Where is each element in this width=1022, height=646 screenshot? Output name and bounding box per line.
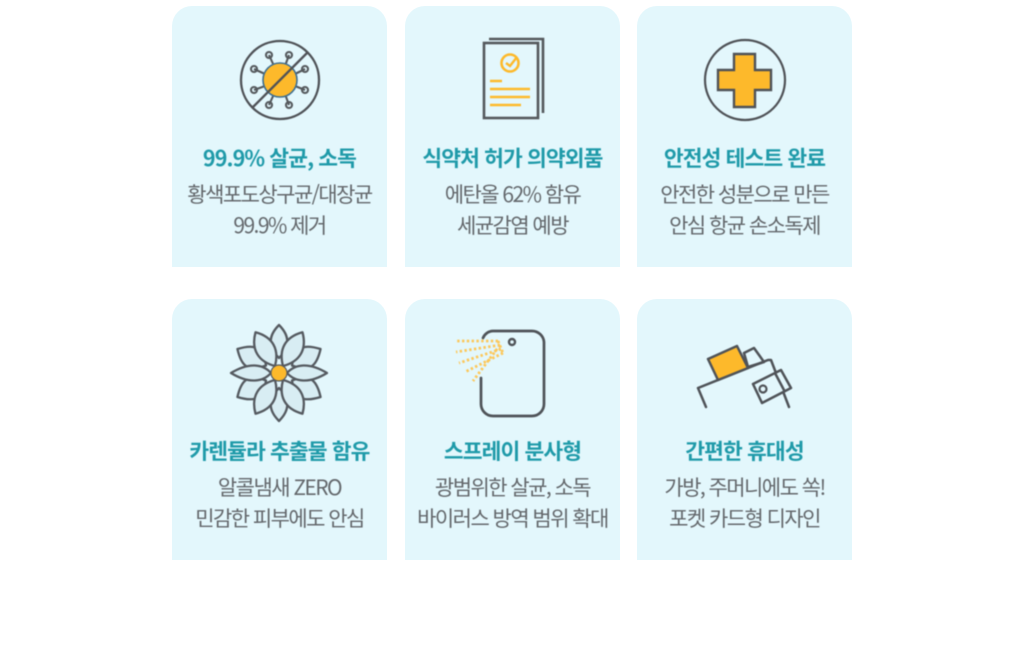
panel: spray <box>405 299 620 560</box>
description: 광범위한 살균, 소독 <box>435 472 590 502</box>
description: 포켓 카드형 디자인 <box>669 503 820 533</box>
heading: 99.9% 살균, 소독 <box>203 142 356 173</box>
description: 알콜냄새 ZERO <box>218 472 341 502</box>
description <box>664 472 825 533</box>
description: 99.9% 제거 <box>233 210 326 240</box>
panel: MFDS approved <box>405 6 620 267</box>
icon: medical cross <box>703 38 787 122</box>
description: 민감한 피부에도 안심 <box>195 503 364 533</box>
heading: 스프레이 분사형 <box>444 435 581 466</box>
description <box>445 179 582 240</box>
icon: approved document <box>482 37 546 120</box>
icon: wallet with card <box>696 344 793 409</box>
icon: crossed-out virus <box>239 39 321 121</box>
description: 안심 항균 손소독제 <box>669 210 820 240</box>
heading: 카렌듈라 추출물 함유 <box>189 435 370 466</box>
description <box>187 179 373 240</box>
description: 에탄올 62% 함유 <box>445 179 580 209</box>
panel: portability <box>637 299 852 560</box>
description <box>660 179 830 240</box>
heading: 간편한 휴대성 <box>685 435 804 466</box>
panel: 99.9% sterilization <box>172 6 387 267</box>
description <box>195 472 364 533</box>
icon: spray card <box>455 328 546 418</box>
description: 안전한 성분으로 만든 <box>660 179 829 209</box>
panel: safety test <box>637 6 852 267</box>
description: 황색포도상구균/대장균 <box>187 179 372 209</box>
description <box>417 472 608 533</box>
description: 세균감염 예방 <box>457 210 568 240</box>
icon: flower <box>229 323 329 423</box>
description: 가방, 주머니에도 쏙! <box>664 472 825 502</box>
heading: 안전성 테스트 완료 <box>664 142 825 173</box>
description: 바이러스 방역 범위 확대 <box>417 503 608 533</box>
panel: calendula extract <box>172 299 387 560</box>
heading: 식약처 허가 의약외품 <box>422 142 603 173</box>
